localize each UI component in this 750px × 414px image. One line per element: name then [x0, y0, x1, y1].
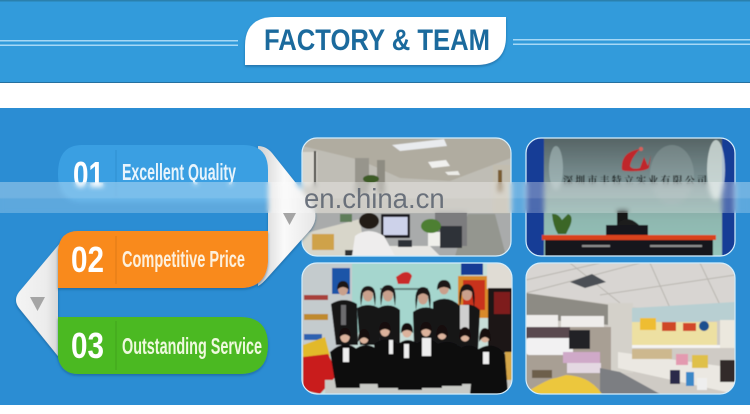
photo: showroom — [526, 263, 735, 394]
back row — [331, 299, 480, 350]
label: Competitive Price: Competitive Price — [122, 246, 245, 272]
back row heads — [337, 286, 473, 305]
front row hair — [339, 322, 491, 342]
main blue panel — [0, 108, 750, 405]
photo: office — [302, 138, 511, 256]
sign lettering: 深圳市丰特立实业有限公司 — [563, 172, 707, 187]
step 01 — [58, 145, 268, 202]
front row shirts — [343, 338, 489, 364]
step 02 — [58, 231, 268, 288]
title: FACTORY & TEAM — [264, 24, 490, 57]
left connector — [16, 236, 66, 366]
number 02: 02 — [71, 239, 104, 280]
icon: arrow down right — [283, 213, 296, 225]
left divider lines — [0, 40, 238, 46]
front row heads — [339, 328, 490, 344]
front row — [330, 339, 508, 394]
photo: team — [302, 263, 512, 394]
photo: reception — [526, 138, 735, 256]
label: Excellent Quality: Excellent Quality — [122, 159, 236, 185]
title plaque — [245, 17, 506, 65]
photo border: office — [302, 138, 511, 256]
header band — [0, 0, 750, 83]
number 01: 01 — [73, 154, 104, 195]
step 03 — [58, 317, 268, 374]
icon: arrow down left — [30, 297, 45, 311]
back row hair — [337, 280, 475, 310]
watermark band — [0, 182, 750, 213]
right connector — [258, 146, 316, 286]
right divider lines — [513, 39, 750, 45]
number 03: 03 — [71, 325, 104, 366]
photo border: team — [302, 263, 512, 394]
label: Outstanding Service: Outstanding Service — [122, 333, 262, 359]
photo border: showroom — [526, 263, 735, 394]
photo border: reception — [526, 138, 735, 256]
watermark text: en.china.cn — [304, 183, 445, 214]
